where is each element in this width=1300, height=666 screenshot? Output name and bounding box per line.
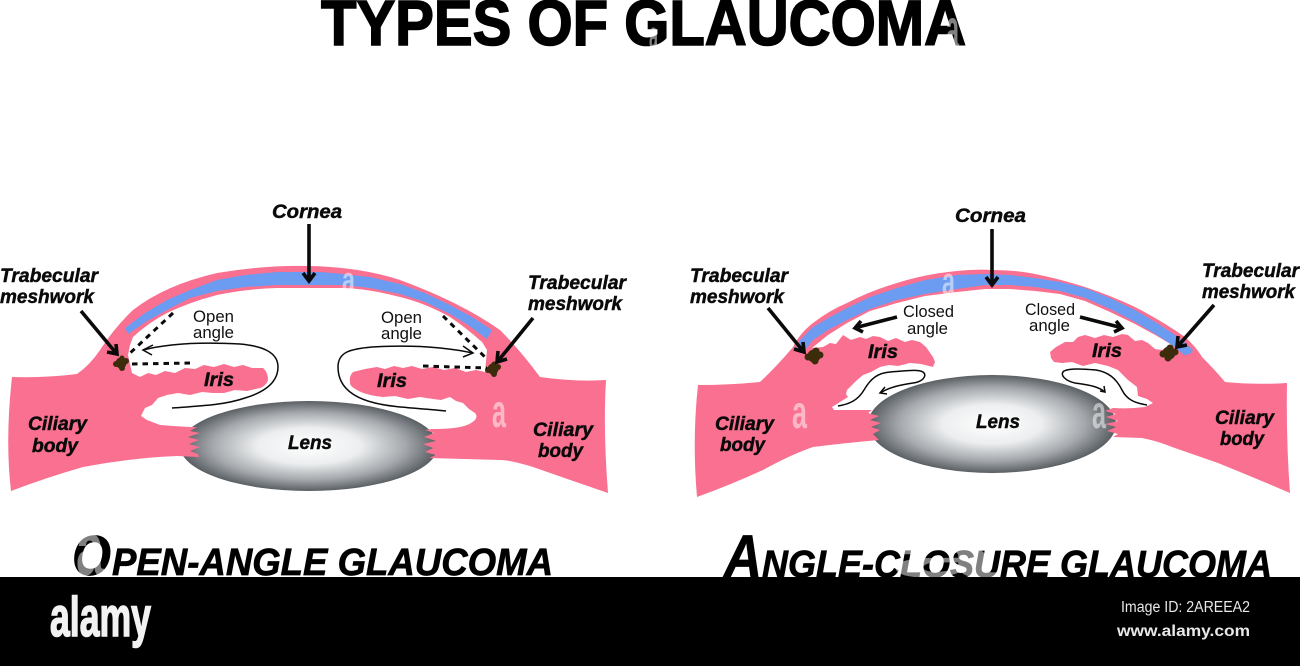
watermark letters: a — [649, 15, 658, 57]
label: trabecular meshwork, left: meshwork — [690, 287, 785, 308]
lens — [868, 375, 1116, 473]
label: open angle, right: angle — [381, 324, 422, 343]
arrow to closed angle, left — [855, 317, 897, 332]
trabecular meshwork blob, left — [113, 356, 129, 371]
label: iris, right: Iris — [1092, 341, 1122, 362]
label: closed angle, right: angle — [1029, 316, 1070, 335]
watermark letters: a — [76, 507, 104, 592]
label: iris, left: Iris — [204, 370, 234, 391]
aqueous flow arrow, right — [338, 346, 473, 411]
panel: angle-closure diagram — [690, 206, 1300, 497]
aqueous flow arrow, left — [838, 370, 925, 406]
label: trabecular meshwork, left: Trabecular — [690, 266, 790, 287]
arrow to closed angle, right — [1080, 317, 1122, 332]
lens — [180, 401, 438, 491]
arrow to cornea — [303, 224, 315, 281]
arrow to cornea — [986, 229, 998, 285]
label: iris, right: Iris — [377, 371, 407, 392]
trabecular meshwork blob, right — [485, 362, 501, 377]
aqueous flow arrow, left — [143, 343, 278, 408]
label: trabecular meshwork, left: meshwork — [0, 287, 95, 308]
watermark letters: a — [792, 386, 807, 438]
subtitle: open-angle glaucoma: O — [72, 524, 111, 588]
label: trabecular meshwork, left: Trabecular — [0, 266, 100, 287]
arrow to trabecular meshwork, left — [768, 308, 804, 352]
trabecular meshwork blob, right — [1160, 344, 1178, 362]
watermark letters — [76, 0, 1106, 592]
label: trabecular meshwork, right: meshwork — [1202, 282, 1296, 303]
label: open angle, right: Open — [381, 308, 422, 327]
aqueous flow arrow, right — [1062, 369, 1147, 405]
subtitle: open-angle glaucoma: PEN-ANGLE GLAUCOMA — [112, 542, 553, 584]
label: open angle, left: Open — [193, 307, 234, 326]
open angle dashed lines, right — [423, 316, 488, 368]
label: ciliary body, right: body — [538, 441, 584, 462]
arrow to trabecular meshwork, right — [1177, 305, 1214, 347]
label: iris, left: Iris — [868, 342, 898, 363]
lens: Lens — [976, 412, 1020, 433]
website: www.alamy.com — [1116, 623, 1250, 640]
watermark letters: a — [942, 260, 955, 304]
label: closed angle, right: Closed — [1025, 300, 1075, 319]
label: ciliary body, left: body — [720, 435, 766, 456]
label: ciliary body, left: Ciliary — [28, 414, 88, 435]
label: trabecular meshwork, right: Trabecular — [1202, 261, 1300, 282]
label: trabecular meshwork, right: meshwork — [528, 294, 623, 315]
ciliary body, iris and cornea tissue — [8, 266, 608, 493]
subtitle: angle-closure glaucoma: A — [722, 523, 762, 590]
label: ciliary body, right: body — [1220, 429, 1265, 450]
lens: Lens — [288, 433, 332, 454]
label: trabecular meshwork, right: Trabecular — [528, 273, 628, 294]
label: ciliary body, right: Ciliary — [533, 420, 594, 441]
label: ciliary body, right: Ciliary — [1215, 408, 1275, 429]
label: ciliary body, left: Ciliary — [715, 414, 775, 435]
watermark letters: a — [890, 523, 1000, 590]
watermark letters: a — [492, 385, 506, 437]
image id: Image ID: 2AREEA2 — [1121, 599, 1250, 616]
ciliary body, iris and cornea tissue — [695, 270, 1290, 497]
label: cornea: Cornea — [272, 202, 342, 223]
label: ciliary body, left: body — [32, 436, 79, 457]
cornea blue layer — [125, 272, 492, 339]
arrow to trabecular meshwork, right — [497, 318, 533, 362]
open angle dashed lines, left — [128, 313, 193, 364]
footer bar — [0, 577, 1300, 666]
watermark letters: a — [1092, 386, 1106, 438]
panel: open-angle diagram — [0, 202, 628, 493]
cornea blue layer — [795, 274, 1193, 355]
alamy logo: alamy — [50, 585, 151, 648]
label: closed angle, left: angle — [907, 319, 948, 338]
trabecular meshwork blob, left — [804, 348, 824, 364]
label: cornea: Cornea — [955, 206, 1026, 227]
subtitle: angle-closure glaucoma: NGLE-CLOSURE GLAUCOMA — [762, 544, 1272, 586]
label: closed angle, left: Closed — [903, 302, 954, 321]
arrow to trabecular meshwork, left — [81, 311, 117, 354]
label: open angle, left: angle — [193, 323, 234, 342]
watermark letters: a — [342, 259, 356, 300]
